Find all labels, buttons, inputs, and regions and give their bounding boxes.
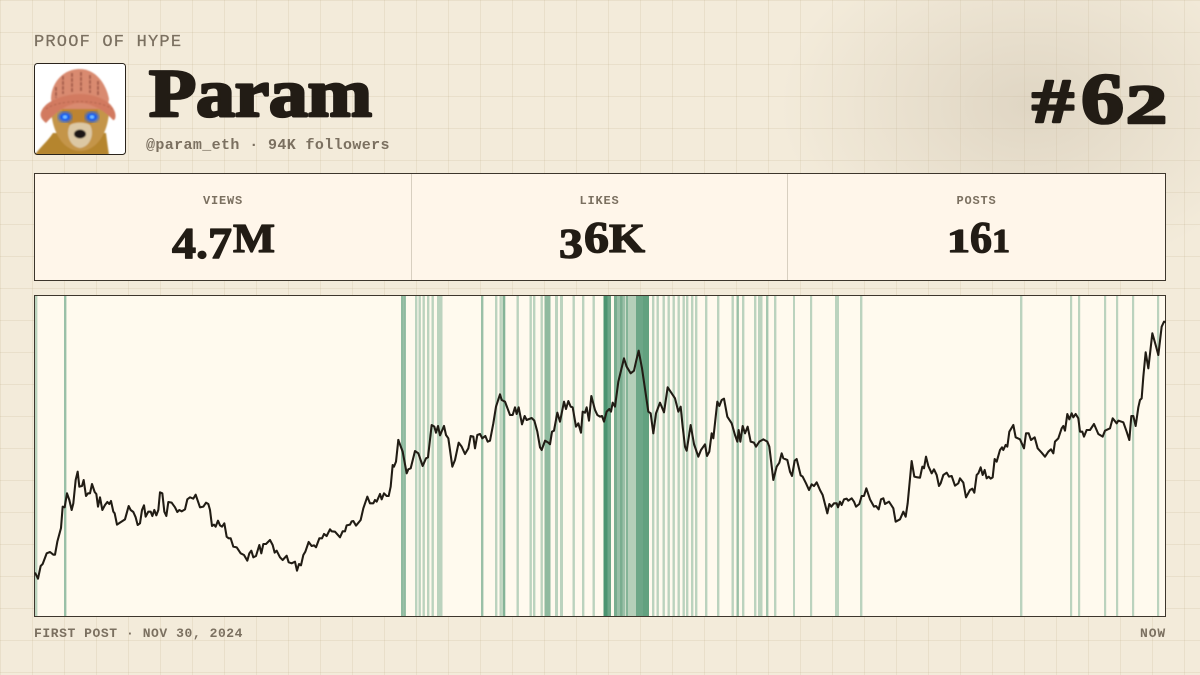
stat: likes: LIKES xyxy=(579,194,620,208)
footer: first post date: FIRST POST · NOV 30, 2024 xyxy=(34,626,243,641)
line chart xyxy=(35,322,1165,579)
post markers xyxy=(35,296,1159,616)
handle and followers: @param_eth · 94K followers xyxy=(146,137,390,154)
stat: views: VIEWS xyxy=(203,194,243,208)
icon: avatar dog with knitted hat xyxy=(34,63,126,155)
stat: posts xyxy=(947,194,1010,262)
stat: views: M xyxy=(233,215,275,261)
stat: views: 4.7 xyxy=(172,219,232,268)
rank: 2 xyxy=(1126,74,1167,135)
stat: likes: K xyxy=(609,215,645,261)
stat: posts: POSTS xyxy=(956,194,996,208)
rank: 6 xyxy=(1081,59,1124,139)
stat: likes: 3 xyxy=(559,222,583,268)
eyebrow label: PROOF OF HYPE xyxy=(34,33,182,52)
stat: posts: 6 xyxy=(970,213,992,262)
stat: views xyxy=(172,194,275,268)
stat: likes xyxy=(559,194,646,268)
rank: # xyxy=(1032,68,1074,136)
stat: posts: 1 xyxy=(947,223,970,260)
footer: now: NOW xyxy=(1140,626,1166,641)
title: name: Param xyxy=(149,55,372,131)
stat: likes: 6 xyxy=(584,213,609,262)
rank xyxy=(1032,59,1167,139)
chart: hype line with post markers xyxy=(34,295,1166,617)
stat: posts: 1 xyxy=(992,223,1010,260)
panel: stats xyxy=(34,173,1166,281)
